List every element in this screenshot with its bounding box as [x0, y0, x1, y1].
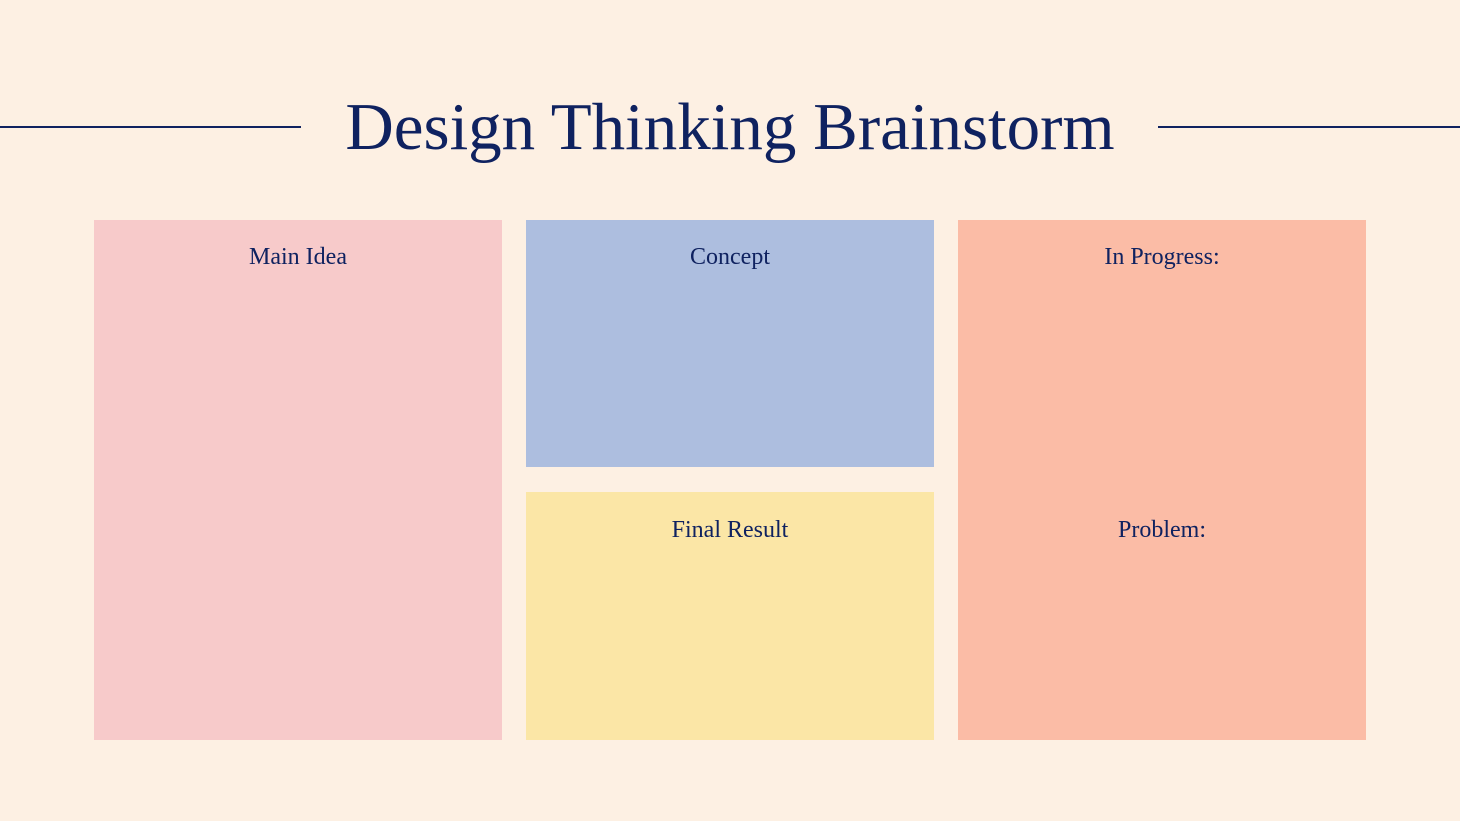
panel: final result [526, 492, 934, 740]
panel: concept [526, 220, 934, 467]
label: concept: Concept [690, 244, 770, 270]
panel: in progress / problem [958, 220, 1366, 740]
title: Design Thinking Brainstorm [345, 90, 1115, 164]
label: problem: Problem: [1118, 517, 1206, 543]
panel: main idea [94, 220, 502, 740]
label: final result: Final Result [672, 517, 788, 543]
label: in progress: In Progress: [1104, 244, 1220, 270]
label: main idea: Main Idea [249, 244, 347, 270]
